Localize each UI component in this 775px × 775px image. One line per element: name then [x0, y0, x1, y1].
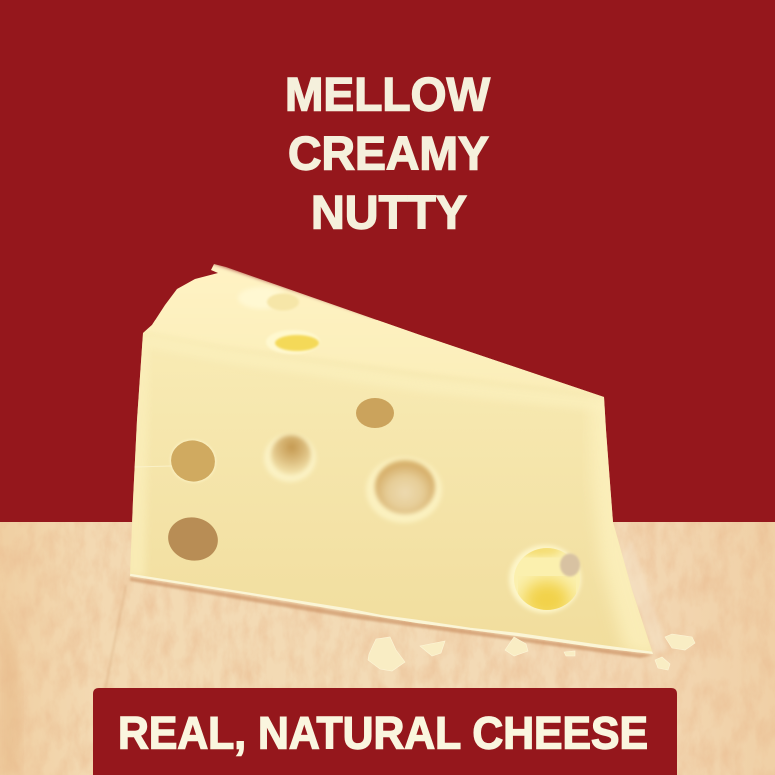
crumb — [564, 651, 575, 656]
hole: left lower — [164, 513, 222, 565]
hole: top front — [266, 330, 320, 354]
title: flavor words — [285, 68, 491, 238]
crumb right — [665, 634, 695, 650]
hole: round dent centre-left — [264, 434, 316, 482]
cheese wedge — [120, 260, 665, 660]
crumb — [420, 641, 445, 656]
word: nutty: NUTTY — [311, 186, 467, 238]
banner panel — [93, 688, 677, 775]
hole: top rear — [238, 287, 299, 310]
hole: yellow dent — [509, 544, 581, 620]
crumb large — [368, 637, 405, 671]
banner — [93, 688, 677, 775]
red background — [0, 0, 775, 522]
right edge highlight — [592, 395, 652, 652]
cheese front face — [120, 320, 660, 660]
wooden table — [0, 522, 775, 775]
cheese top face — [120, 260, 610, 395]
crumb — [505, 637, 528, 656]
banner text: REAL, NATURAL CHEESE — [118, 708, 648, 758]
crumb lower right — [655, 657, 670, 670]
cheese crumbs — [368, 634, 695, 671]
hole: large dent — [366, 457, 442, 523]
hole: small tan — [356, 398, 394, 428]
bottom rind — [130, 576, 653, 654]
word: mellow: MELLOW — [285, 68, 491, 120]
cheese shadow — [130, 577, 653, 658]
word: creamy: CREAMY — [288, 126, 489, 180]
hole: left upper — [166, 435, 220, 487]
